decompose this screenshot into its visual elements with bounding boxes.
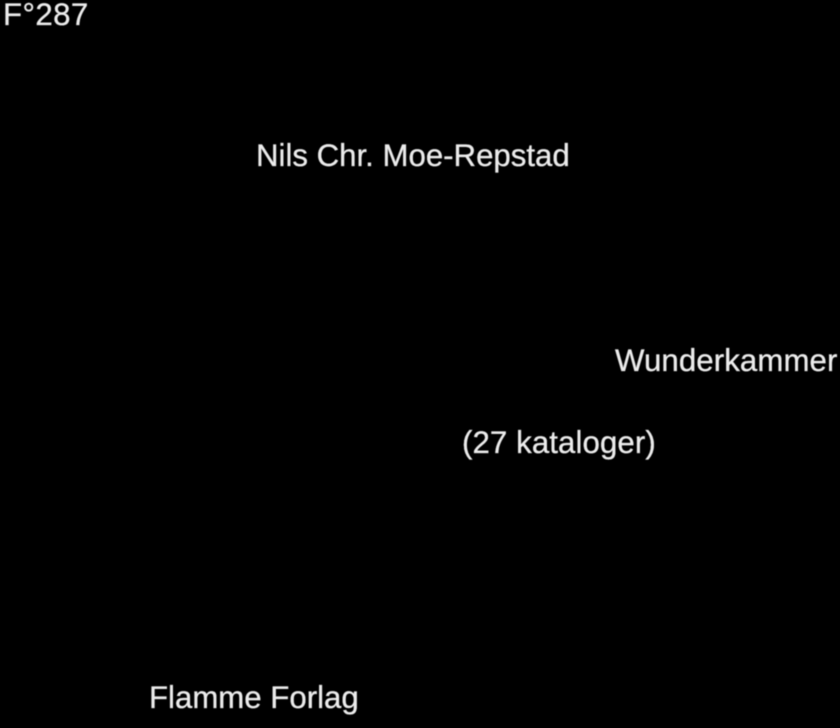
author name: Nils Chr. Moe-Repstad <box>256 138 570 173</box>
publisher: Flamme Forlag <box>149 680 359 715</box>
title: Wunderkammer <box>615 343 837 378</box>
subtitle: catalogue count: (27 kataloger) <box>462 425 656 460</box>
